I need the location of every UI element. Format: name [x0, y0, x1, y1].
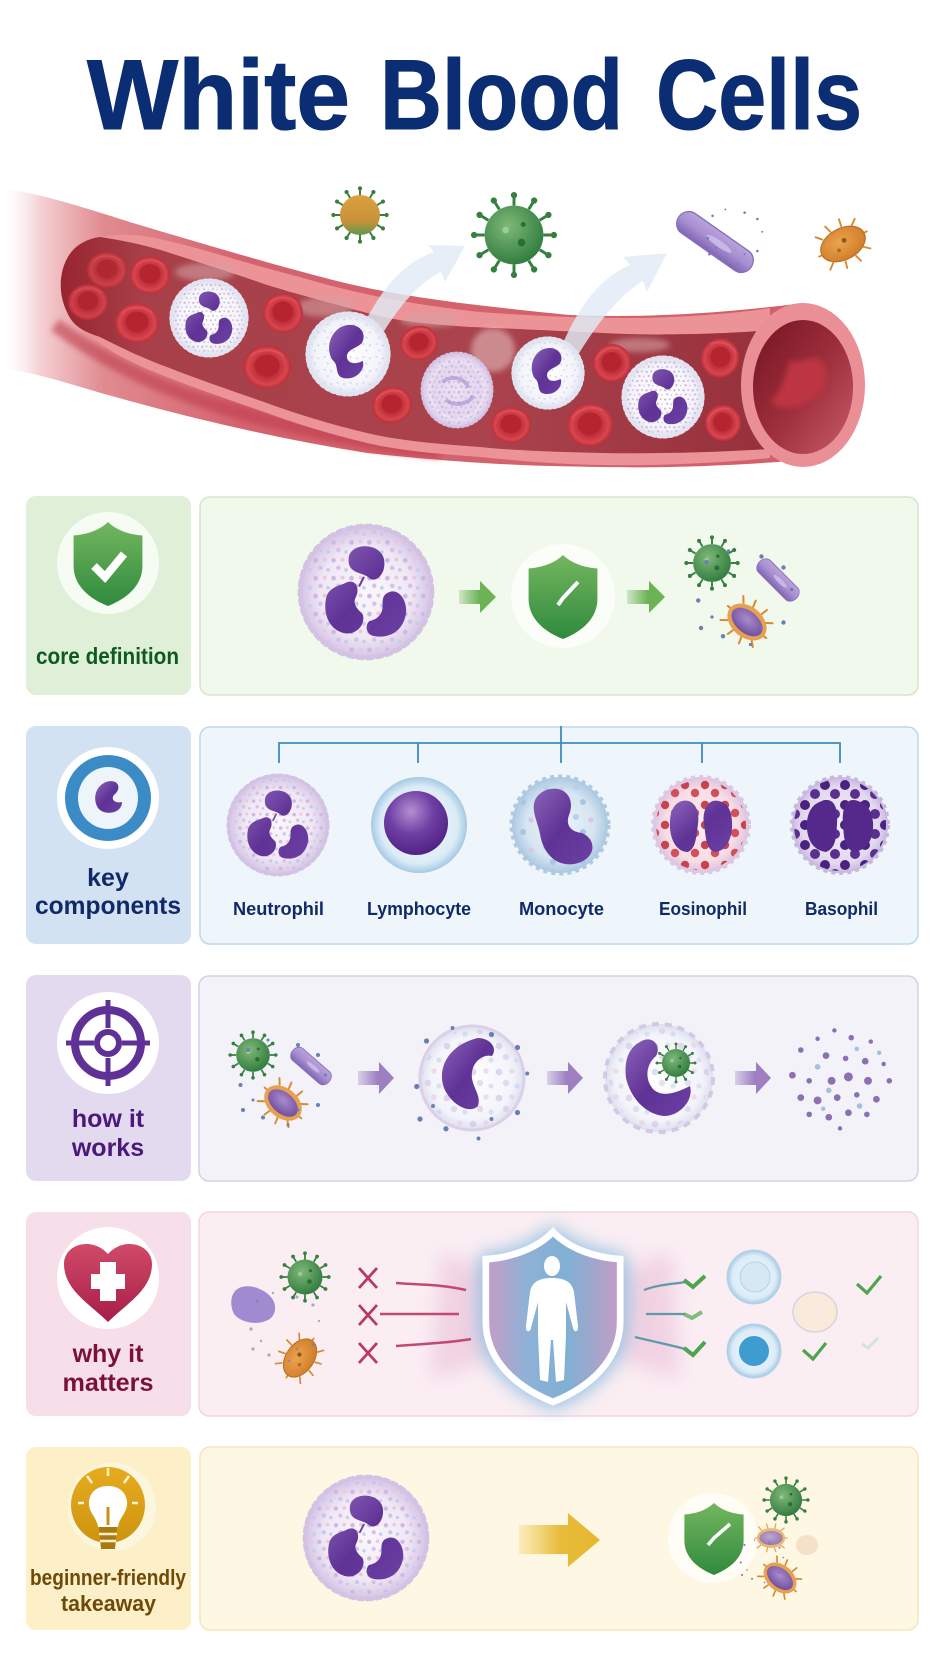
debris — [789, 1028, 892, 1131]
row: key components — [26, 726, 918, 944]
small orange-green virus — [333, 188, 387, 242]
arrow — [627, 581, 665, 613]
labels: Neutrophil — [233, 899, 324, 919]
eosinophil — [653, 777, 749, 873]
fading pathogen — [793, 1292, 837, 1332]
labels: Basophil — [805, 899, 878, 919]
destroyed pathogens — [686, 537, 802, 655]
labels: Lymphocyte — [367, 899, 471, 919]
pathogens — [333, 188, 878, 277]
white cell engulfing — [605, 1024, 713, 1132]
monocyte — [512, 777, 608, 873]
title: Cells — [656, 39, 862, 150]
vessel body — [0, 188, 803, 467]
shield icon — [511, 544, 615, 648]
heading: why it matters: matters — [62, 1369, 154, 1397]
heading: takeaway: takeaway — [61, 1591, 157, 1616]
white cell approaching — [414, 1026, 529, 1140]
panel: key components label — [26, 726, 191, 944]
row: core definition — [26, 496, 918, 695]
migrating arrows — [367, 245, 667, 355]
green virus — [474, 195, 554, 275]
lymphocyte — [371, 777, 467, 873]
arrow — [459, 581, 496, 613]
arrow — [358, 1062, 394, 1094]
shield and defeated pathogens — [668, 1478, 818, 1605]
arrow — [735, 1062, 771, 1094]
heading: takeaway — [30, 1565, 187, 1616]
purple bacterium — [231, 1286, 275, 1323]
heading: why it matters — [62, 1340, 154, 1397]
rays right — [635, 1282, 685, 1349]
blood vessel illustration — [0, 188, 878, 467]
panel: why it matters content — [199, 1212, 918, 1416]
heading: why it matters: why it — [72, 1340, 144, 1368]
panel: how it works content — [199, 976, 918, 1181]
rays left — [380, 1283, 471, 1346]
body in shield — [486, 1232, 620, 1402]
purple bacillus — [672, 207, 763, 277]
title — [87, 39, 862, 150]
heading: key components: key — [87, 864, 129, 892]
vessel lumen — [61, 237, 770, 453]
red blood cells — [68, 252, 748, 452]
icon: light bulb — [68, 1463, 156, 1551]
row: beginner-friendly takeaway — [26, 1447, 918, 1630]
labels: Monocyte — [519, 899, 604, 919]
pathogens blocked — [231, 1253, 331, 1389]
heading: core definition: core definition — [36, 643, 179, 669]
row: how it works — [26, 975, 918, 1181]
heading: key components — [35, 864, 181, 920]
panel: why it matters label — [26, 1212, 191, 1416]
pathogens — [230, 1032, 334, 1134]
shield glow — [430, 1225, 680, 1409]
white blood cells — [171, 280, 703, 437]
heading: key components: components — [35, 892, 181, 920]
labels — [233, 899, 878, 919]
panel: takeaway label — [26, 1447, 191, 1630]
heading: how it works: works — [71, 1134, 144, 1162]
connector tree — [279, 726, 840, 763]
panel: how it works label — [26, 975, 191, 1181]
panel: core definition label — [26, 496, 191, 695]
neutrophil — [229, 776, 327, 874]
icon: cell in blue ring — [57, 747, 159, 849]
migrating white cells — [307, 313, 583, 408]
title: Blood — [380, 39, 623, 150]
title: White — [87, 39, 350, 150]
neutrophil — [305, 1477, 427, 1599]
neutrophil — [300, 526, 432, 658]
panel: key components content — [200, 727, 918, 944]
basophil — [792, 777, 888, 873]
vessel upper wall — [100, 235, 770, 334]
panel: takeaway content — [200, 1447, 918, 1630]
arrow — [519, 1513, 600, 1567]
orange bacterium — [808, 210, 878, 277]
protected cells — [727, 1250, 781, 1378]
row: why it matters — [26, 1212, 918, 1416]
heading: takeaway: beginner-friendly — [30, 1565, 187, 1590]
arrow — [547, 1062, 583, 1094]
icon: target — [57, 992, 159, 1094]
vessel lower wall — [80, 328, 770, 465]
icon: heart with cross — [57, 1227, 159, 1329]
heading: how it works: how it — [72, 1105, 145, 1133]
green checks — [684, 1276, 881, 1359]
heading: how it works — [71, 1105, 145, 1162]
red crosses — [359, 1268, 377, 1363]
labels: Eosinophil — [659, 899, 747, 919]
panel: core definition content — [200, 497, 918, 695]
vessel open end — [741, 303, 865, 467]
icon: green shield with check — [57, 512, 159, 614]
lumen highlights — [175, 263, 670, 352]
